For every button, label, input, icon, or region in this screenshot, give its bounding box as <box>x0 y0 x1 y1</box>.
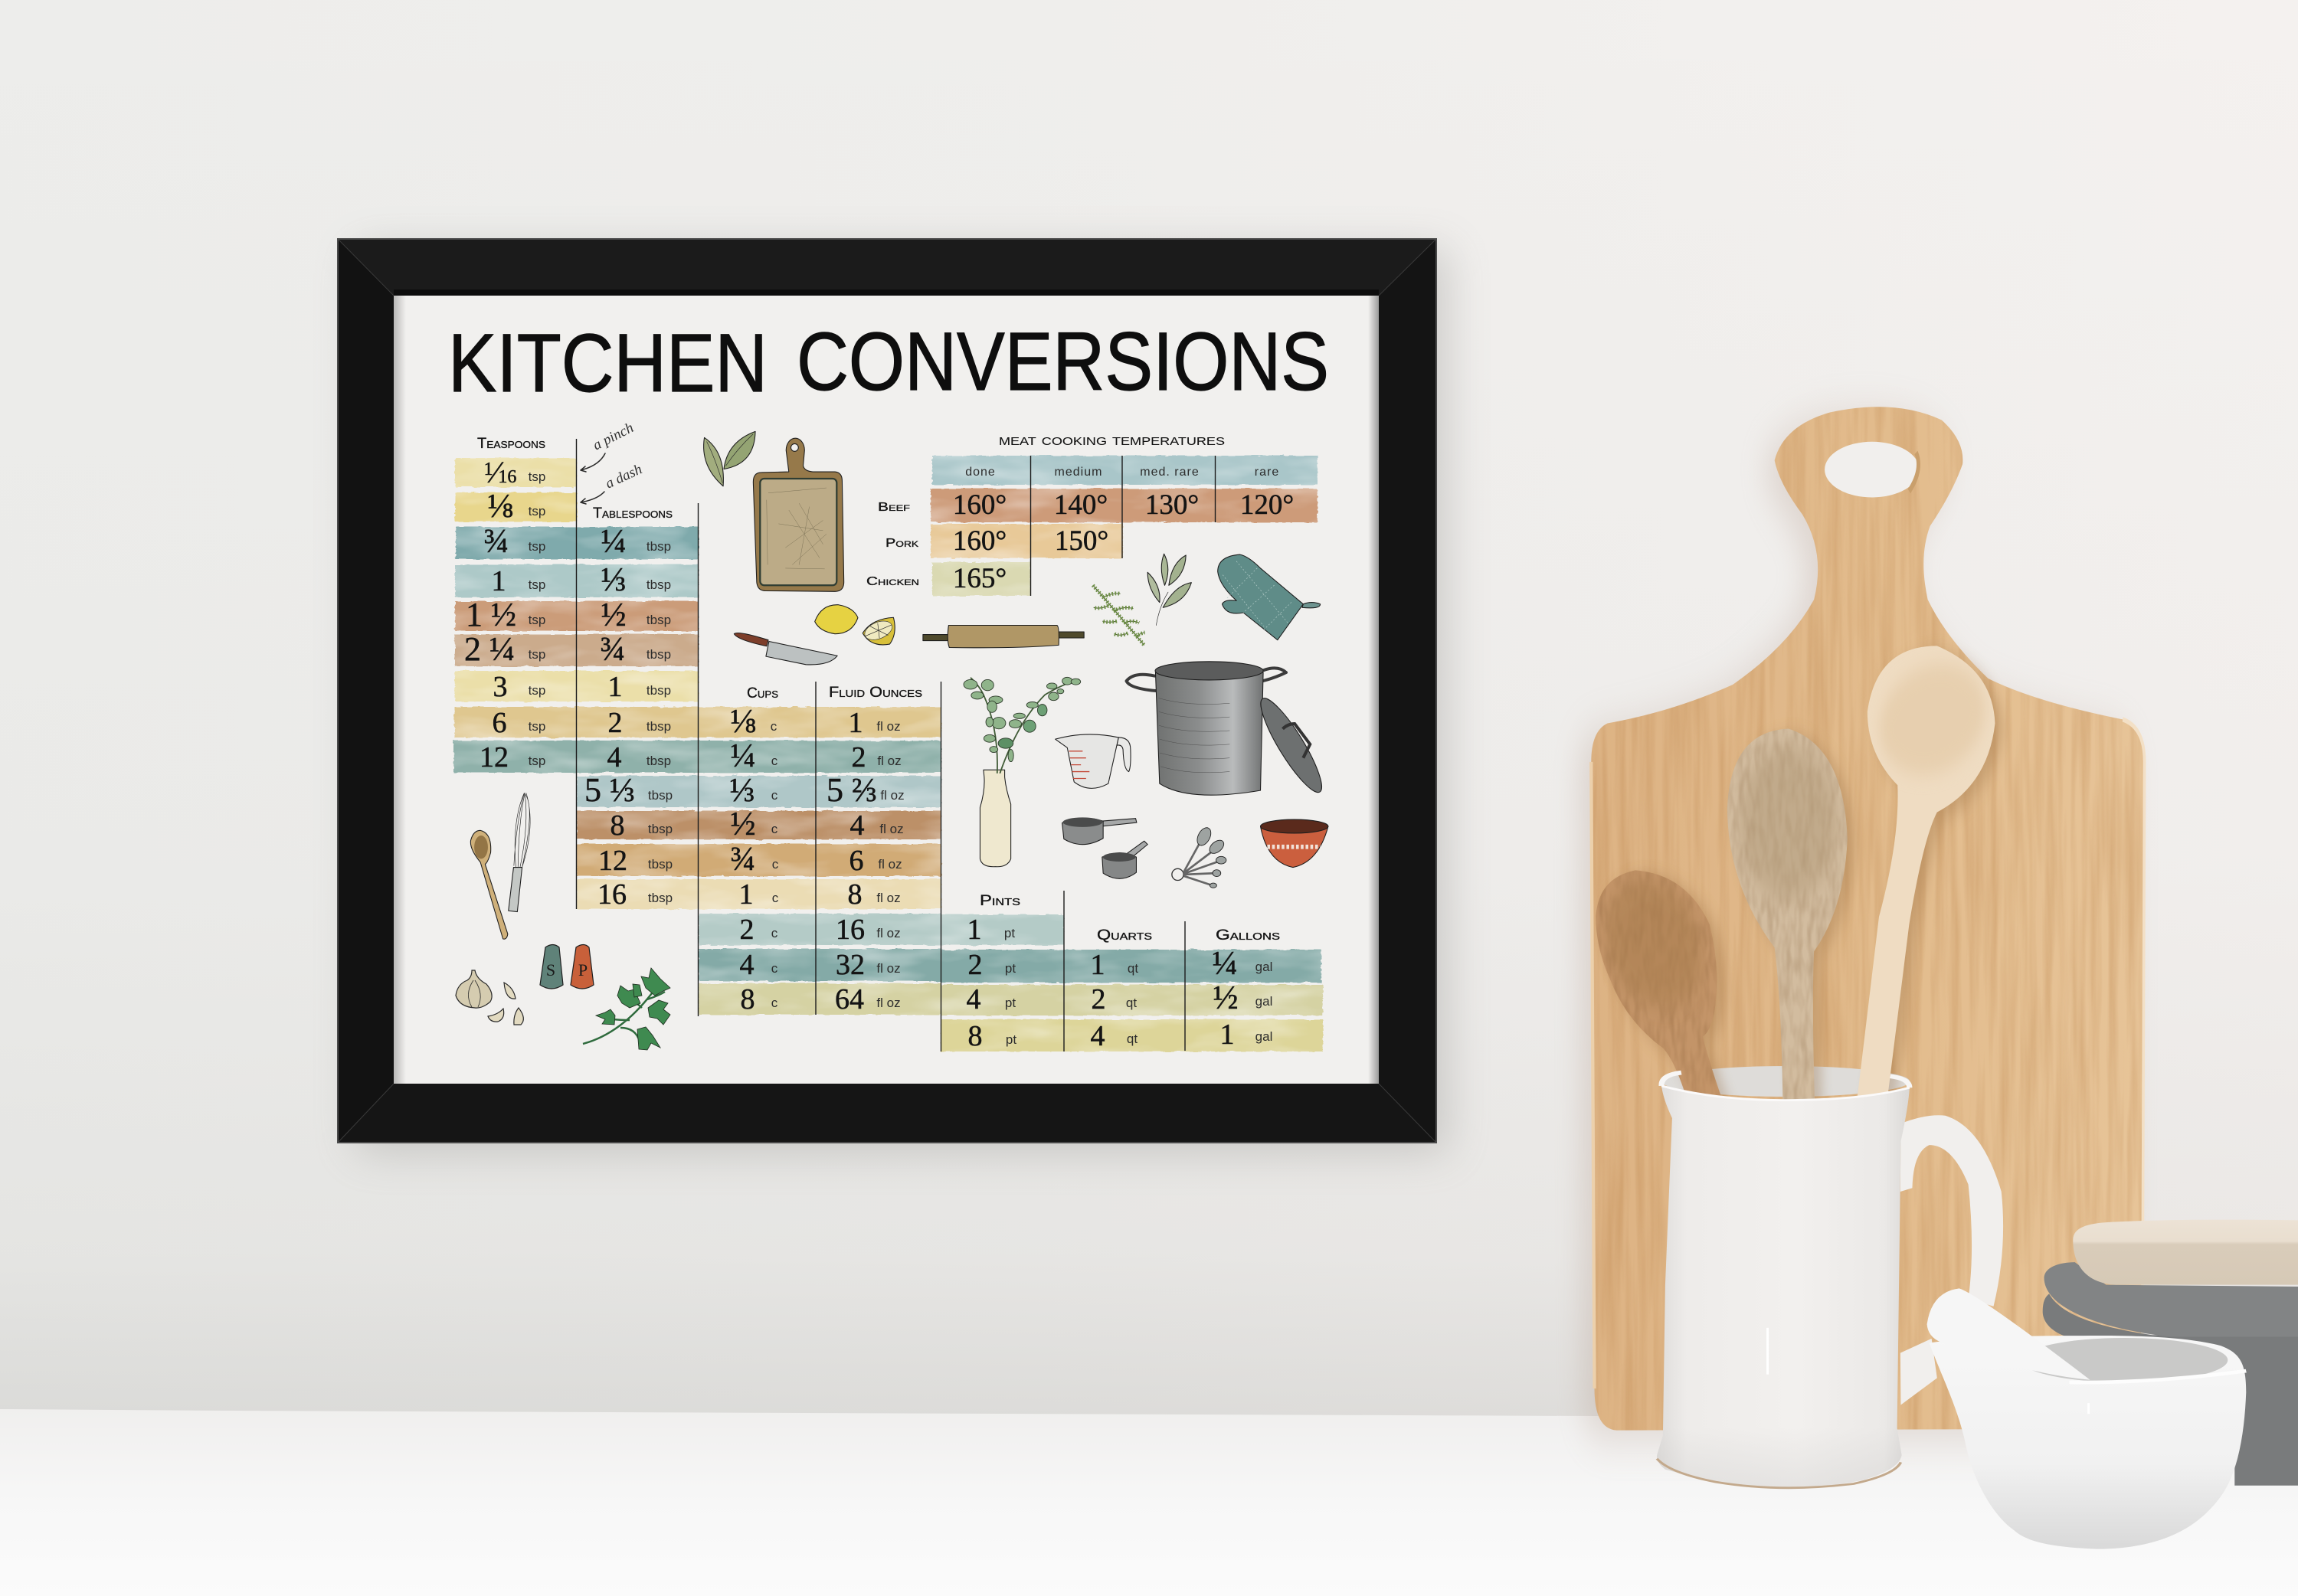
icon: parsley sprig <box>583 968 670 1050</box>
heading: quarts: Quarts <box>1097 927 1152 944</box>
panel: gallons column <box>1185 927 1323 1051</box>
row values: fluid ounces: fl oz <box>876 719 901 734</box>
heading: tablespoons: Tablespoons <box>593 505 673 522</box>
heading: pints: Pints <box>980 893 1020 909</box>
column labels: med. rare <box>1140 466 1200 479</box>
row values: teaspoons: tsp <box>529 577 545 592</box>
row values: teaspoons: 1 ½ <box>466 596 516 633</box>
row values: cups: ¾ <box>731 840 755 878</box>
row label: pork: Pork <box>885 537 919 550</box>
row values: tablespoons: tbsp <box>647 719 671 734</box>
row values: tablespoons: ⅓ <box>601 561 627 598</box>
row values: fluid ounces: 4 <box>850 809 864 842</box>
icon: bay leaves <box>704 431 755 486</box>
note: a pinch: a pinch <box>591 420 637 453</box>
shadow of board on wall <box>1579 414 2133 1438</box>
row values: pints: 8 <box>968 1020 982 1052</box>
panel: pints column <box>941 893 1064 1052</box>
row values: gallons: gal <box>1255 994 1272 1009</box>
row values: teaspoons: 1 <box>492 565 506 597</box>
heading: fluid ounces: Fluid Ounces <box>829 685 922 701</box>
note: a pinch <box>581 420 637 472</box>
row values: pints: pt <box>1005 961 1016 976</box>
temperatures: 160° <box>953 489 1007 521</box>
row values: tablespoons: ¼ <box>601 522 627 560</box>
row values: quarts: 2 <box>1091 983 1106 1015</box>
temperatures: 165° <box>953 563 1007 594</box>
row values: tablespoons: 5 ⅓ <box>584 771 635 809</box>
row values: tablespoons: 8 <box>610 809 625 842</box>
frame drop shadow <box>356 249 1448 1153</box>
row values: cups: c <box>771 961 778 976</box>
row values: teaspoons: 6 <box>492 707 507 739</box>
icon: wooden cutting board <box>753 438 844 591</box>
icon: rolling pin <box>923 626 1084 648</box>
photo: dark wooden spoon <box>1596 859 1726 1110</box>
row values: tablespoons: tbsp <box>648 891 673 905</box>
row values: gallons: gal <box>1255 960 1272 974</box>
row values: tablespoons: 16 <box>597 878 627 911</box>
row values: pints: pt <box>1005 996 1016 1010</box>
panel: fluid ounces column <box>816 685 941 1015</box>
row values: teaspoons: 3 <box>493 671 507 703</box>
row values: pints: pt <box>1004 926 1015 940</box>
row values: fluid ounces: 6 <box>849 845 864 877</box>
row values: gallons: 1 <box>1219 1019 1235 1051</box>
row label: chicken: Chicken <box>866 575 919 588</box>
row values: teaspoons: tsp <box>529 647 545 662</box>
watercolor strips: cups <box>699 707 816 1015</box>
row values: fluid ounces: 8 <box>847 878 863 911</box>
row values: teaspoons: 2 ¼ <box>464 630 515 668</box>
row values: tablespoons: tbsp <box>647 754 671 768</box>
icon: oven mitt <box>1218 554 1321 640</box>
row values: quarts: qt <box>1127 1032 1138 1046</box>
heading: meat cooking temperatures: meat cooking temperatures <box>999 431 1225 449</box>
icon: eucalyptus in milk bottle <box>964 677 1081 867</box>
title <box>448 315 1329 409</box>
row values: cups: c <box>772 891 779 905</box>
row values: teaspoons: tsp <box>529 539 545 554</box>
row values: quarts <box>1091 949 1138 1052</box>
temperatures <box>953 489 1294 594</box>
row values: tablespoons: tbsp <box>648 857 673 872</box>
row values: cups: c <box>771 996 778 1010</box>
row values: tablespoons: ¾ <box>601 630 625 668</box>
row values: fluid ounces: fl oz <box>876 996 901 1010</box>
row values: fluid ounces: fl oz <box>876 926 901 940</box>
row values: teaspoons: ⁄ <box>487 455 504 489</box>
row values: teaspoons: tsp <box>529 754 545 768</box>
watercolor strips: pints <box>941 914 1064 1051</box>
watercolor strips: quarts <box>1064 950 1185 1051</box>
row values: fluid ounces: 32 <box>836 949 865 981</box>
heading: teaspoons: Teaspoons <box>477 436 545 452</box>
row values: fluid ounces: fl oz <box>879 822 904 836</box>
illustrations drawn in right zoom space <box>923 554 1331 888</box>
icon: salt shaker: S <box>546 960 555 980</box>
row values: tablespoons: 4 <box>607 741 622 773</box>
panel: quarts column <box>1064 927 1185 1052</box>
black picture frame <box>338 239 1436 1143</box>
row values: cups: ½ <box>731 805 755 842</box>
row values: pints: 1 <box>967 914 982 946</box>
title: CONVERSIONS <box>797 315 1329 407</box>
row values: tablespoons: tbsp <box>647 683 671 698</box>
row values: pints: pt <box>1006 1032 1016 1047</box>
photo: spoon shadows <box>1603 652 2002 1116</box>
icon: pepper shaker: P <box>578 960 588 980</box>
watercolor strips: tablespoons <box>577 527 699 909</box>
row values: tablespoons: tbsp <box>647 577 671 592</box>
row values: cups: c <box>772 857 779 872</box>
row values: gallons: ¼ <box>1212 944 1238 982</box>
photo: stacked grey and beige bowls <box>2043 1220 2298 1486</box>
row values: fluid ounces <box>827 707 905 1015</box>
row values: quarts: 4 <box>1091 1020 1105 1052</box>
row values: cups: c <box>771 754 778 768</box>
row values: cups: 1 <box>738 878 754 911</box>
column labels <box>965 466 1279 479</box>
row values: cups: ⅛ <box>731 702 755 740</box>
row values: fluid ounces: fl oz <box>876 961 901 976</box>
column labels: done <box>965 466 996 479</box>
row values: fluid ounces: 2 <box>852 741 866 773</box>
photo: wooden cutting board <box>1591 407 2145 1431</box>
row values: cups: 4 <box>740 949 754 981</box>
temperatures: 150° <box>1055 525 1108 557</box>
row values: pints: 4 <box>967 983 980 1015</box>
row values: cups: 2 <box>740 914 754 946</box>
row values: quarts: qt <box>1128 961 1138 976</box>
photo background: white counter top <box>0 1409 2298 1596</box>
row values: teaspoons: tsp <box>529 613 545 627</box>
note: a dash: a dash <box>603 461 645 492</box>
icon: measuring cup <box>1056 734 1131 788</box>
icon: pot lid <box>1252 692 1331 798</box>
icon: thyme sprig <box>1093 585 1145 645</box>
row values: fluid ounces: 16 <box>836 914 865 946</box>
icon: sage sprig <box>1147 554 1191 626</box>
icon: whisk <box>509 793 530 912</box>
icon: stock pot <box>1127 662 1286 795</box>
row values: teaspoons: 16 <box>498 467 516 487</box>
row values: cups: 8 <box>740 983 755 1015</box>
column labels: medium <box>1055 466 1102 479</box>
row values: teaspoons <box>464 455 545 773</box>
row values: fluid ounces: fl oz <box>876 891 901 905</box>
row label: beef: Beef <box>878 501 910 514</box>
row values: teaspoons: 1 <box>484 460 493 479</box>
row values: fluid ounces: 1 <box>849 707 863 739</box>
row values: cups: ⅓ <box>729 771 755 809</box>
row values: tablespoons: tbsp <box>648 822 673 836</box>
photo: jug interior behind spoons <box>1661 1066 1910 1097</box>
row values: tablespoons: tbsp <box>647 647 671 662</box>
row values: tablespoons: ½ <box>601 596 627 633</box>
temperatures: 120° <box>1240 489 1294 521</box>
row values: cups: c <box>771 788 778 803</box>
row values: fluid ounces: 5 ⅔ <box>827 771 877 809</box>
photo: light wooden spoon <box>1856 646 1995 1110</box>
heading: cups: Cups <box>747 685 778 702</box>
panel: meat cooking temperatures <box>866 431 1318 596</box>
row values: teaspoons: tsp <box>529 504 545 518</box>
row values: fluid ounces: fl oz <box>878 857 902 872</box>
icon: garlic bulb and cloves <box>456 970 523 1025</box>
column divider lines <box>576 439 1215 1051</box>
row values: teaspoons: tsp <box>529 683 545 698</box>
temperatures: 160° <box>953 525 1007 557</box>
photo: white ceramic jug <box>1657 1073 2003 1489</box>
row values: pints: 2 <box>968 949 982 981</box>
icon: measuring spoons <box>1172 826 1226 888</box>
row values: teaspoons: tsp <box>529 469 545 484</box>
row values: cups: c <box>771 719 777 734</box>
row values: quarts: 1 <box>1091 949 1105 981</box>
row values: teaspoons: tsp <box>529 719 545 734</box>
row values: gallons: gal <box>1255 1029 1272 1044</box>
temperatures: 130° <box>1145 489 1199 521</box>
watercolor strips: meat table <box>931 456 1318 596</box>
icon: pepper shaker <box>571 945 594 989</box>
row values: fluid ounces: fl oz <box>877 754 902 768</box>
row values: tablespoons: tbsp <box>647 613 671 627</box>
column labels: rare <box>1255 466 1279 479</box>
icon: lemons <box>815 605 895 645</box>
heading: gallons: Gallons <box>1216 927 1280 944</box>
watercolor strips: fluid ounces <box>816 707 941 1015</box>
print paper <box>394 296 1379 1084</box>
photo: white mortar and pestle <box>1927 1288 2246 1549</box>
row values: tablespoons: tbsp <box>647 539 671 554</box>
row values: cups <box>729 702 779 1015</box>
icon: red mixing bowl <box>1261 819 1328 868</box>
row values: tablespoons: 2 <box>608 707 622 739</box>
row values: quarts: qt <box>1126 996 1137 1010</box>
icon: salt shaker <box>540 945 563 989</box>
row values: fluid ounces: 64 <box>835 983 864 1015</box>
row values: tablespoons: 12 <box>598 845 627 877</box>
illustrations drawn in left zoom space <box>470 431 895 939</box>
row values: teaspoons: ¾ <box>484 522 509 560</box>
row values: cups: ¼ <box>731 737 755 774</box>
row values: tablespoons <box>584 522 673 911</box>
row values: tablespoons: tbsp <box>648 788 673 803</box>
temperatures: 140° <box>1054 489 1108 521</box>
watercolor strips: gallons <box>1185 950 1323 1051</box>
watercolor strips: teaspoons <box>453 458 577 773</box>
row values: cups: c <box>771 926 778 940</box>
row values: gallons: ½ <box>1213 979 1238 1016</box>
icon: measuring cups <box>1062 817 1147 878</box>
row values: cups: c <box>771 822 778 836</box>
panel: teaspoons column <box>453 436 577 773</box>
panel: tablespoons column <box>577 505 699 911</box>
row values: pints <box>967 914 1016 1052</box>
icon: chef knife <box>734 633 837 665</box>
row values: teaspoons: ⅛ <box>487 487 513 525</box>
row values: fluid ounces: fl oz <box>880 788 905 803</box>
icon: wooden spoon <box>470 830 508 939</box>
photo: middle wooden spoon <box>1727 729 1848 1110</box>
row values: gallons <box>1212 944 1272 1051</box>
note: a dash <box>581 461 645 504</box>
row values: tablespoons: 1 <box>608 671 622 703</box>
panel: cups column <box>699 685 816 1015</box>
row values: teaspoons: 12 <box>480 741 509 773</box>
title: KITCHEN <box>448 316 768 409</box>
